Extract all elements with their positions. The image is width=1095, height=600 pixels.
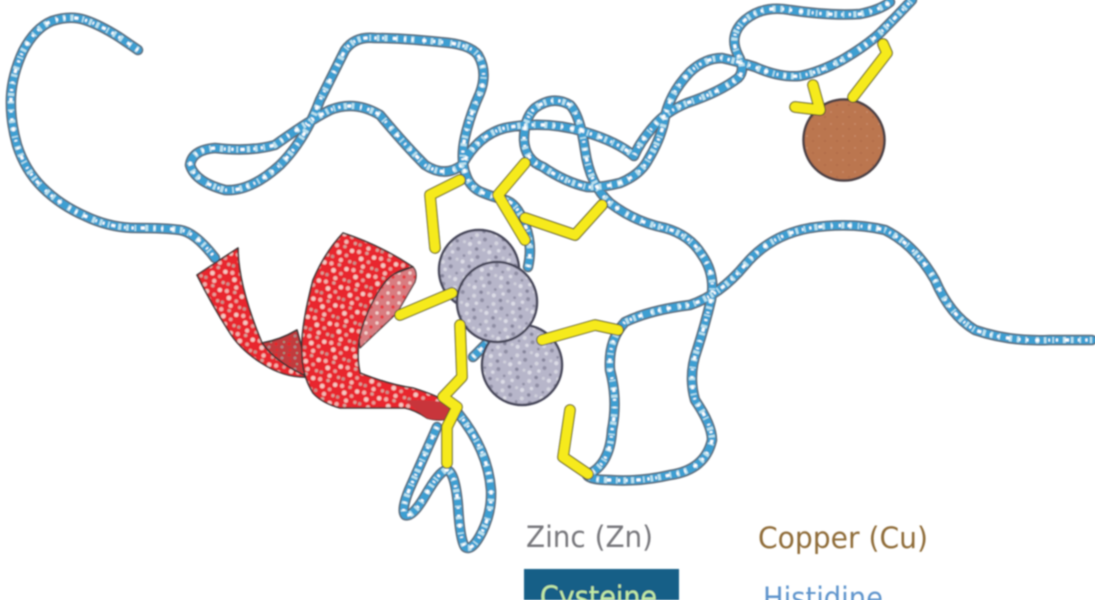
zinc atom top bbox=[439, 230, 519, 310]
legend: zinc label: Zinc (Zn) bbox=[526, 520, 653, 554]
copper atom bbox=[804, 100, 884, 180]
legend: cysteine label bbox=[524, 569, 679, 600]
legend: copper label: Copper (Cu) bbox=[758, 521, 928, 555]
red alpha helix ribbon bbox=[197, 233, 457, 420]
zinc atom lower bbox=[482, 325, 562, 405]
yellow side chains bbox=[400, 44, 887, 474]
zinc atom middle bbox=[457, 262, 537, 342]
